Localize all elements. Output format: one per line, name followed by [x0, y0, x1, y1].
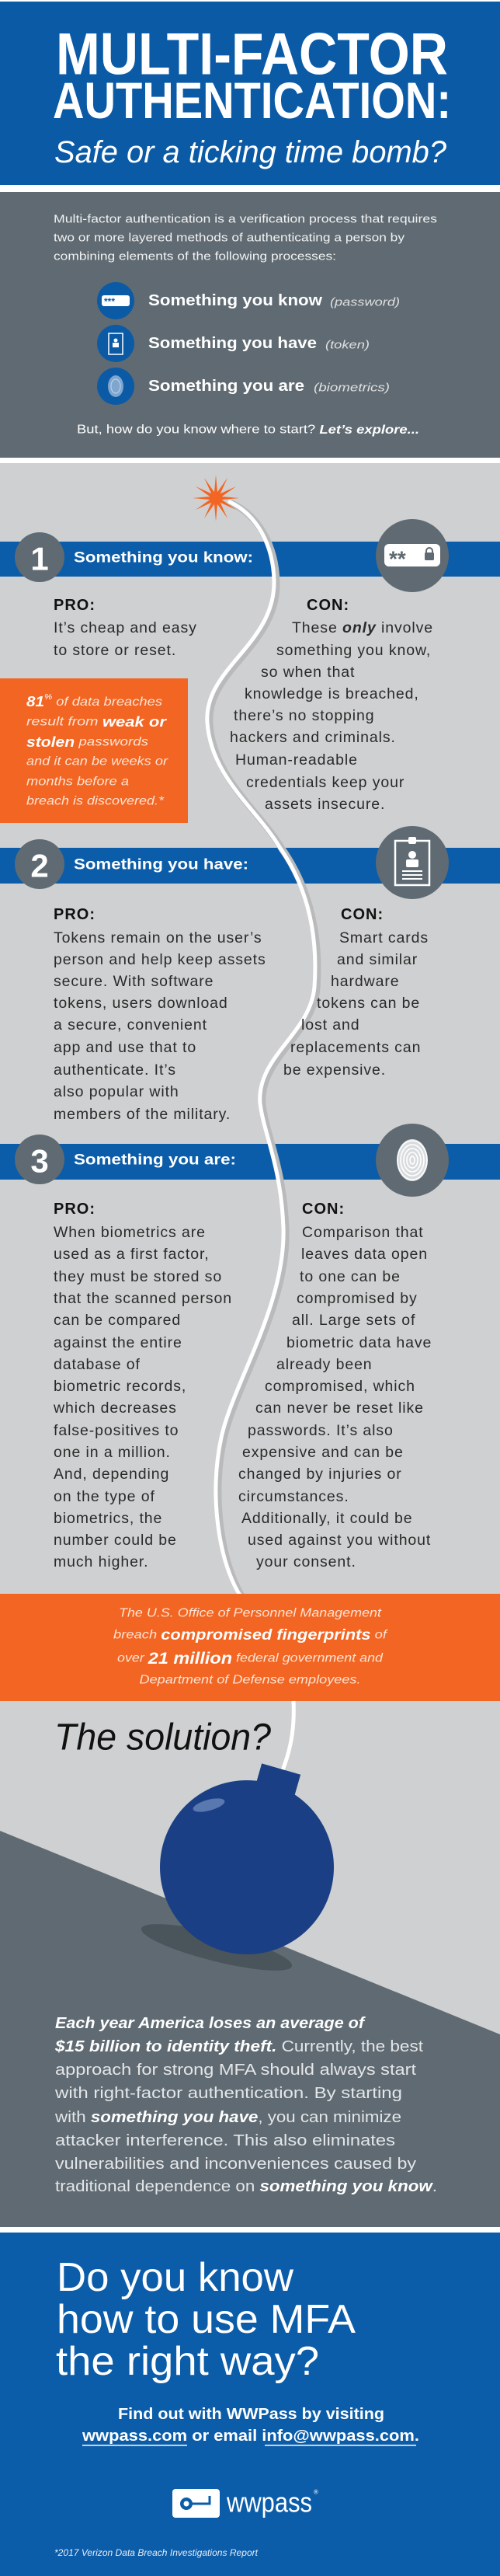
callout: 81% stat: result from weak or: [26, 714, 167, 730]
icon: password: **: [389, 547, 406, 570]
heading: CTA: how to use MFA: [57, 2297, 356, 2342]
callout: OPM breach: over 21 million federal government and: [117, 1649, 384, 1668]
band 1: 1: [30, 541, 49, 577]
callout: 81% stat: breach is discovered.*: [26, 794, 165, 808]
callout: 81% stat: months before a: [26, 776, 129, 788]
section 3 pro: biometrics, the: [54, 1510, 162, 1527]
heading: CTA: [56, 2255, 356, 2384]
section 3 con: changed by injuries or: [238, 1466, 402, 1483]
section 3 pro: When biometrics are: [54, 1224, 206, 1241]
section 3 pro: one in a million.: [54, 1444, 171, 1461]
icon: fingerprint small: [97, 368, 134, 405]
section 1 con: credentials keep your: [246, 774, 405, 791]
title: [53, 22, 451, 129]
section 2 pro: authenticate. It’s: [54, 1061, 176, 1079]
section 3 pro: on the type of: [54, 1488, 155, 1505]
list item: know: (password): [330, 295, 400, 309]
section 2 pro: [54, 906, 266, 1123]
heading: CTA: the right way?: [56, 2339, 319, 2384]
section 3 con: leaves data open: [301, 1246, 428, 1263]
contact text: wwpass.com or email info@wwpass.com.: [82, 2428, 419, 2445]
section 3 con: circumstances.: [238, 1488, 349, 1505]
intro paragraph: two or more layered methods of authenticating a person by: [54, 232, 405, 244]
contact text: Find out with WWPass by visiting: [118, 2406, 384, 2423]
icon: password small: ***: [104, 296, 115, 307]
icon: fingerprint: [376, 1124, 449, 1197]
solution paragraph: Each year America loses an average of: [55, 2015, 366, 2032]
icon: badge small: [97, 325, 134, 362]
band 3: Something you are:: [74, 1152, 236, 1169]
section 3 con: already been: [276, 1356, 373, 1373]
solution paragraph: [54, 2015, 437, 2195]
section 3 con: used against you without: [248, 1532, 431, 1549]
section 1 con: These only involve: [292, 619, 433, 636]
section 1 con: something you know,: [276, 642, 431, 659]
section 1 pro: to store or reset.: [54, 642, 176, 659]
section 3 pro: biometric records,: [54, 1378, 186, 1395]
band 3: [0, 1135, 500, 1184]
section 3 pro: can be compared: [54, 1312, 181, 1329]
section 1 con: [230, 597, 433, 813]
solution paragraph: traditional dependence on something you know .: [55, 2178, 437, 2195]
section 2 pro: members of the military.: [54, 1106, 231, 1123]
callout: 81% stat: stolen passwords: [26, 734, 148, 750]
section 2 pro: person and help keep assets: [54, 951, 266, 968]
icon: badge: [376, 826, 449, 899]
band 1: [0, 532, 500, 582]
section 1 pro: [54, 597, 197, 659]
callout: 81% stat: [0, 678, 188, 823]
callout: 81% stat: and it can be weeks or: [26, 755, 168, 768]
header panel: [0, 2, 500, 185]
section 3 con: expensive and can be: [242, 1444, 404, 1461]
section 3 con: compromised, which: [265, 1378, 415, 1395]
section 3 pro: number could be: [54, 1532, 177, 1549]
section 2 con: [283, 906, 429, 1079]
section 3 pro: false-positives to: [54, 1422, 179, 1439]
list item: are: (biometrics): [314, 381, 390, 395]
contact text: [82, 2406, 419, 2446]
section 3 con: CON:: [302, 1201, 345, 1218]
section 2 con: hardware: [331, 973, 399, 990]
section 2 con: replacements can: [290, 1039, 421, 1056]
subtitle: Safe or a ticking time bomb?: [54, 135, 447, 169]
section 3 pro: much higher.: [54, 1553, 148, 1570]
section 2 pro: app and use that to: [54, 1039, 196, 1056]
panel: intro: [0, 192, 500, 458]
section 1 con: CON:: [307, 597, 349, 614]
section 1 con: Human-readable: [235, 751, 358, 769]
panel: footer: [0, 2233, 500, 2576]
section 1 pro: PRO:: [54, 597, 95, 614]
section 3 pro: they must be stored so: [54, 1268, 222, 1285]
section 3 pro: that the scanned person: [54, 1290, 232, 1307]
list item: are: [148, 378, 390, 395]
section 2 con: CON:: [341, 906, 384, 923]
band 2: Something you have:: [74, 856, 248, 873]
section 3 con: to one can be: [300, 1268, 401, 1285]
icon: spark: [193, 475, 239, 521]
section 3 pro: And, depending: [54, 1466, 169, 1483]
section 3 pro: database of: [54, 1356, 141, 1373]
section 3 con: Additionally, it could be: [241, 1510, 413, 1527]
logo: wwpass: ®: [314, 2488, 318, 2496]
band 2: 2: [30, 847, 49, 884]
list item: have: (token): [325, 339, 370, 351]
icon: password small: [97, 282, 134, 319]
section 2 con: be expensive.: [283, 1061, 386, 1079]
icon: bomb: [138, 1763, 334, 1980]
panel: factors background: [0, 463, 500, 1706]
list item: have: [148, 335, 370, 352]
section 1 con: there’s no stopping: [234, 707, 375, 724]
section 2 pro: secure. With software: [54, 973, 214, 990]
section 3 con: all. Large sets of: [292, 1312, 415, 1329]
solution paragraph: attacker interference. This also eliminates: [55, 2132, 395, 2149]
section 3 pro: which decreases: [53, 1400, 177, 1417]
band 2: [0, 839, 500, 889]
footnote: *2017 Verizon Data Breach Investigations Report: [54, 2547, 259, 2558]
section 2 pro: tokens, users download: [54, 995, 228, 1012]
section 2 con: Smart cards: [339, 929, 429, 946]
fuse end: [280, 1701, 293, 1776]
section 1 pro: It’s cheap and easy: [54, 619, 197, 636]
logo: wwpass: wwpass: [226, 2487, 312, 2518]
section 3 pro: [53, 1201, 232, 1570]
section 3 con: passwords. It’s also: [248, 1422, 394, 1439]
section 2 con: lost and: [301, 1016, 360, 1034]
heading: solution: The solution?: [54, 1717, 271, 1758]
section 3 pro: used as a first factor,: [54, 1246, 210, 1263]
section 1 con: assets insecure.: [265, 796, 385, 813]
solution paragraph: approach for strong MFA should always start: [55, 2062, 417, 2079]
intro paragraph: Multi-factor authentication is a verification process that requires: [54, 213, 437, 225]
section 3 con: your consent.: [256, 1553, 356, 1570]
section 1 con: hackers and criminals.: [230, 729, 396, 746]
section 3 pro: against the entire: [54, 1334, 182, 1351]
list item: know: Something you know: [148, 292, 322, 309]
list item: know: [148, 292, 400, 309]
callout: OPM breach: Department of Defense employees.: [140, 1674, 360, 1686]
callout: OPM breach: breach compromised fingerprints of: [113, 1627, 388, 1643]
intro paragraph: combining elements of the following processes:: [54, 250, 336, 263]
callout: 81% stat: %: [44, 693, 52, 701]
band 1: Something you know:: [74, 550, 253, 566]
fuse: [207, 502, 318, 1610]
section 2 con: tokens can be: [317, 995, 420, 1012]
solution paragraph: $15 billion to identity theft. Currently, the best: [54, 2038, 423, 2055]
callout: OPM breach: The U.S. Office of Personnel Management: [119, 1607, 382, 1619]
intro paragraph: [54, 213, 437, 263]
section 3 con: Comparison that: [302, 1224, 424, 1241]
section 2 pro: PRO:: [54, 906, 95, 923]
section 2 pro: Tokens remain on the user’s: [54, 929, 262, 946]
section 2 pro: a secure, convenient: [54, 1016, 207, 1034]
section 3 con: can never be reset like: [255, 1400, 424, 1417]
logo: wwpass: [172, 2487, 318, 2518]
solution paragraph: vulnerabilities and inconveniences caused by: [55, 2156, 416, 2173]
solution paragraph: with something you have , you can minimize: [54, 2109, 401, 2126]
callout: OPM breach: [0, 1594, 500, 1701]
section 3 con: [238, 1201, 432, 1570]
panel: solution: [0, 1701, 500, 2227]
section 1 con: so when that: [261, 664, 355, 681]
section 1 con: knowledge is breached,: [245, 685, 419, 702]
section 3 con: biometric data have: [286, 1334, 432, 1351]
heading: CTA: Do you know: [57, 2255, 293, 2300]
list item: have: Something you have: [148, 335, 317, 352]
icon: password: [376, 519, 449, 592]
callout: 81% stat: of data breaches: [52, 695, 162, 709]
solution paragraph: with right-factor authentication. By starting: [54, 2085, 402, 2102]
explore line: But, how do you know where to start? Let’s explore...: [77, 423, 419, 437]
section 2 pro: also popular with: [54, 1083, 179, 1100]
list item: are: Something you are: [148, 378, 304, 395]
section 3 pro: PRO:: [54, 1201, 95, 1218]
section 3 con: compromised by: [297, 1290, 418, 1307]
section 2 con: and similar: [337, 951, 418, 968]
callout: 81% stat: 81: [26, 694, 44, 709]
title: MULTI-FACTOR: [56, 22, 448, 87]
band 3: 3: [30, 1142, 49, 1180]
